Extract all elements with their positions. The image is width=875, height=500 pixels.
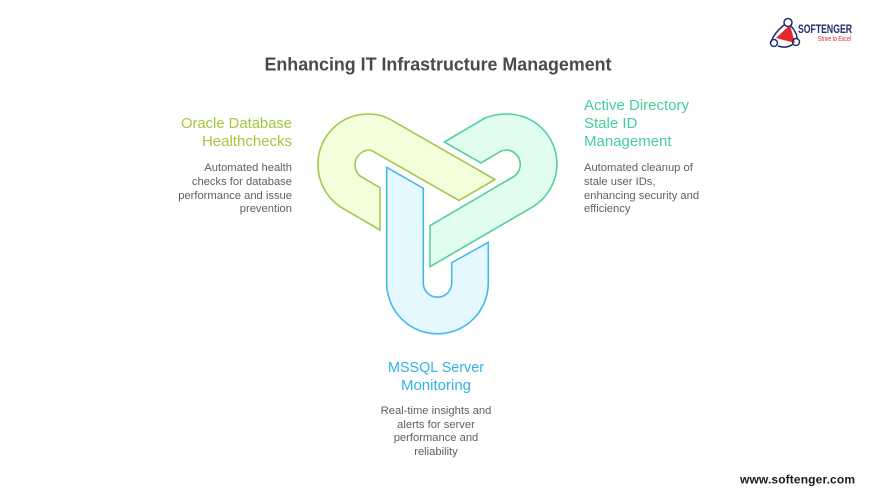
heading: Oracle: Oracle Database — [181, 115, 292, 132]
label: Oracle Database Healthchecks — [178, 115, 292, 215]
link: MSSQL Server Monitoring — [387, 167, 488, 334]
description: MSSQL: performance and — [394, 432, 478, 444]
heading: Active Directory: Active Directory — [584, 97, 690, 114]
description: Active Directory: enhancing security and — [584, 190, 699, 202]
title: Enhancing IT Infrastructure Management — [264, 54, 612, 74]
description: Active Directory — [584, 162, 699, 215]
description: MSSQL: alerts for server — [397, 419, 475, 431]
description: Oracle — [178, 162, 292, 215]
logo: Softenger: Strive to Excel — [818, 34, 851, 43]
heading: Active Directory — [584, 97, 690, 150]
diagram: interlocking triangle — [318, 114, 557, 334]
heading: MSSQL — [388, 359, 484, 394]
logo: Softenger: SOFTENGER — [798, 24, 853, 36]
link: Active Directory Stale ID Management — [430, 114, 557, 267]
heading: Active Directory: Management — [584, 133, 672, 150]
description: Active Directory: stale user IDs, — [584, 176, 656, 188]
website url: www.softenger.com — [739, 472, 855, 486]
description: Active Directory: efficiency — [584, 203, 631, 215]
description: Oracle: Automated health — [204, 162, 292, 174]
description: Oracle: prevention — [240, 203, 292, 215]
logo: Softenger — [770, 18, 853, 47]
label: Active Directory Stale ID Management — [584, 97, 699, 215]
description: MSSQL — [381, 405, 491, 458]
heading: MSSQL: Monitoring — [401, 377, 471, 394]
heading: Oracle — [181, 115, 292, 150]
heading: Active Directory: Stale ID — [584, 115, 638, 132]
description: MSSQL: Real-time insights and — [381, 405, 491, 417]
description: MSSQL: reliability — [414, 446, 458, 458]
label: MSSQL Server Monitoring — [381, 359, 491, 458]
description: Oracle: checks for database — [192, 176, 292, 188]
description: Active Directory: Automated cleanup of — [584, 162, 694, 174]
link: Oracle Database Healthchecks — [318, 114, 495, 230]
description: Oracle: performance and issue — [178, 190, 292, 202]
heading: MSSQL: MSSQL Server — [388, 359, 484, 376]
heading: Oracle: Healthchecks — [202, 133, 292, 150]
